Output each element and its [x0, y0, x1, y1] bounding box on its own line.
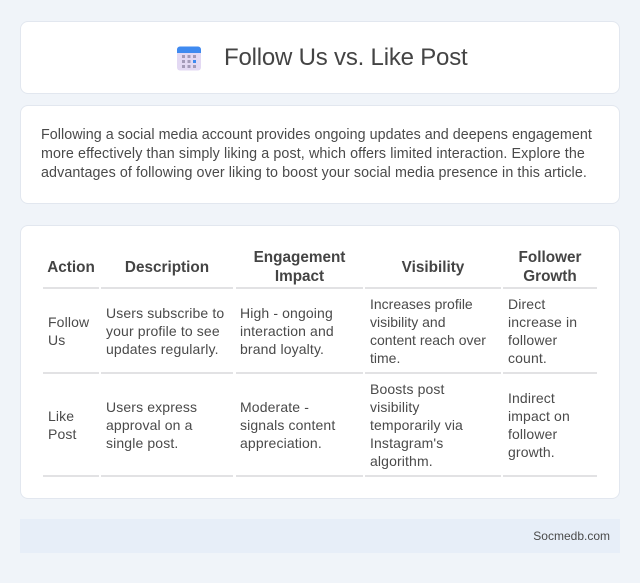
row 2: follower growth: growth. — [508, 444, 555, 460]
header: Engagement Impact — [254, 249, 346, 285]
row 2: follower growth: Indirect — [508, 390, 555, 406]
row 2: visibility: Instagram's — [370, 435, 443, 451]
row 2: follower growth — [508, 390, 570, 460]
intro paragraph: advantages of following over liking to boost your social media presence in this article. — [41, 165, 587, 181]
row 2: visibility: algorithm. — [370, 453, 433, 469]
panel: intro text card — [20, 105, 620, 204]
intro paragraph: Following a social media account provides ongoing updates and deepens engagement — [41, 127, 592, 143]
row 2: visibility: Boosts post — [370, 381, 445, 397]
header: Engagement Impact: Engagement — [254, 249, 345, 266]
row 1: visibility: Increases profile — [370, 296, 473, 312]
panel: title card — [20, 21, 620, 94]
row 1: visibility: time. — [370, 350, 400, 366]
row 2: description — [106, 399, 197, 451]
row 1: visibility — [370, 296, 486, 366]
intro paragraph: more effectively than simply liking a post, which offers limited interaction. Explore the — [41, 146, 585, 162]
row 1: visibility: visibility and — [370, 314, 445, 330]
row 1: engagement impact — [240, 305, 334, 357]
row 1: follower growth: follower — [508, 332, 557, 348]
row 1: follower growth — [508, 296, 577, 366]
row 2: action: Like — [48, 408, 74, 424]
row 1: description: Users subscribe to — [106, 305, 224, 321]
row 2: engagement impact: signals content — [240, 417, 335, 433]
row 1: description: updates regularly. — [106, 341, 219, 357]
header: Visibility: Visibility — [402, 259, 464, 276]
title: Follow Us vs. Like Post — [224, 44, 467, 71]
intro paragraph — [41, 127, 592, 181]
header: Follower Growth — [519, 249, 582, 285]
row 2: description: single post. — [106, 435, 178, 451]
icon: calendar — [177, 46, 201, 70]
row 1: description — [106, 305, 224, 357]
row 2: engagement impact: Moderate - — [240, 399, 309, 415]
row 2: action: Post — [48, 426, 77, 442]
row 2: description: approval on a — [106, 417, 193, 433]
row 2: engagement impact: appreciation. — [240, 435, 322, 451]
header: Follower Growth: Growth — [523, 268, 577, 285]
row 1: follower growth: Direct — [508, 296, 545, 312]
row 1: follower growth: increase in — [508, 314, 577, 330]
row 2: follower growth: impact on — [508, 408, 570, 424]
header: Engagement Impact: Impact — [275, 268, 324, 285]
comparison table — [43, 249, 597, 477]
row 1: engagement impact: interaction and — [240, 323, 334, 339]
header: Description: Description — [125, 259, 209, 276]
row 1: visibility: content reach over — [370, 332, 486, 348]
row 2: engagement impact — [240, 399, 336, 451]
row 1: action: Us — [48, 332, 65, 348]
row 2: visibility: temporarily via — [370, 417, 463, 433]
row 1: description: your profile to see — [106, 323, 220, 339]
row 2: follower growth: follower — [508, 426, 557, 442]
footer source text: Socmedb.com — [533, 529, 610, 543]
row 2: visibility — [370, 381, 463, 469]
row 1: action — [48, 314, 90, 348]
header: Follower Growth: Follower — [519, 249, 581, 266]
row 1: follower growth: count. — [508, 350, 547, 366]
row 2: action — [48, 408, 77, 442]
header: Action: Action — [47, 259, 95, 276]
row 1: engagement impact: High - ongoing — [240, 305, 333, 321]
row 1: action: Follow — [48, 314, 89, 330]
row 1: engagement impact: brand loyalty. — [240, 341, 324, 357]
panel: comparison table card — [20, 225, 620, 499]
panel: footer — [20, 519, 620, 553]
row 2: visibility: visibility — [370, 399, 420, 415]
row 2: description: Users express — [106, 399, 197, 415]
